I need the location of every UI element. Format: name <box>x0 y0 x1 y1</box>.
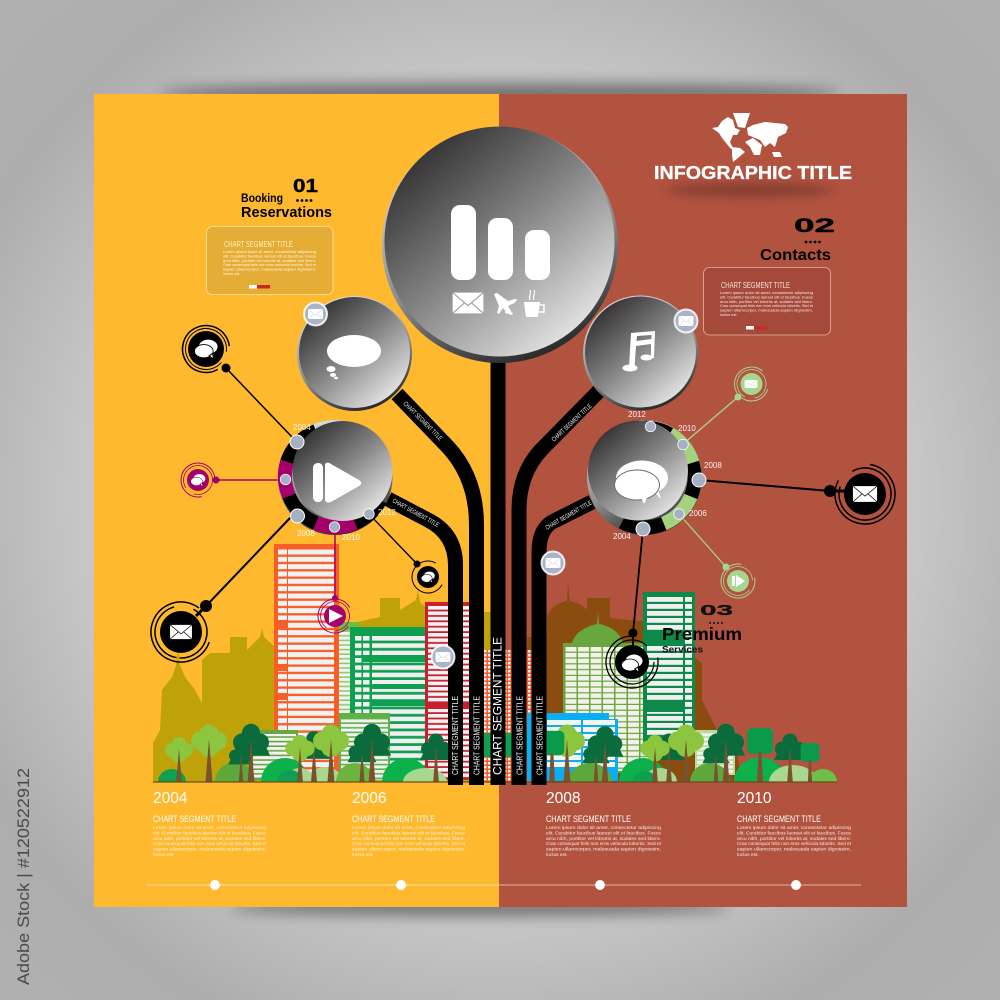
music disc <box>583 296 698 410</box>
text column 2004: elit. Curabitur faucibus laoreet elit et faucibus. Fusce <box>153 830 266 836</box>
text column 2008: Lorem ipsum dolor sit amet, consectetur adipiscing <box>546 825 661 831</box>
text column 2006 <box>352 790 466 858</box>
callout box 02 <box>704 268 830 335</box>
stock credit: Adobe Stock | #120522912 <box>14 768 33 985</box>
centre checker tower <box>484 650 532 782</box>
band labels: CHART SEGMENT TITLE <box>472 696 482 775</box>
main chart disc <box>382 126 618 363</box>
band labels: CHART SEGMENT TITLE <box>534 696 544 775</box>
text column 2006: Lorem ipsum dolor sit amet, consectetur adipiscing <box>352 825 465 831</box>
callout box 01: elit. Curabitur faucibus laoreet elit et faucibus. Fusce <box>223 253 316 258</box>
right dark green tower <box>643 592 695 742</box>
band labels <box>391 400 594 775</box>
play disc with ring <box>278 420 396 542</box>
pale green annex <box>339 622 359 720</box>
title text: INFOGRAPHIC TITLE <box>654 163 852 183</box>
icon: chat bubbles <box>614 460 668 504</box>
text column 2010: 2010 <box>737 790 772 807</box>
icon: play <box>313 463 361 503</box>
text column 2006: sapien ullamcorper, malesuada sapien dignissim, <box>352 847 465 853</box>
callout box 02: Cras consequat felis non eros vehicula lobortis. Sed et <box>720 303 814 308</box>
icon: bar chart <box>451 205 550 280</box>
text column 2008: Cras consequat felis non eros vehicula lobortis. Sed et <box>546 841 662 847</box>
text column 2008: sapien ullamcorper, malesuada sapien dignissim, <box>546 847 661 853</box>
text column 2006: Cras consequat felis non eros vehicula lobortis. Sed et <box>352 841 466 847</box>
text column 2008: CHART SEGMENT TITLE <box>546 814 631 825</box>
node: magenta chat left <box>178 460 220 500</box>
text column 2010: CHART SEGMENT TITLE <box>737 814 821 825</box>
node: black mail left <box>143 594 219 670</box>
text column 2010: sapien ullamcorper, malesuada sapien dignissim, <box>737 847 851 853</box>
text column 2004: CHART SEGMENT TITLE <box>153 814 236 825</box>
year labels: 2010 <box>678 424 696 433</box>
section 02 heading: 02 <box>794 216 835 237</box>
icon: mail <box>453 293 483 313</box>
pale mid-rise left <box>339 713 390 779</box>
section 01 heading: 01 <box>293 176 318 196</box>
red tower <box>425 602 473 780</box>
panel shadow top <box>160 83 840 105</box>
node: magenta play on tower <box>312 593 358 639</box>
text column 2006: CHART SEGMENT TITLE <box>352 814 435 825</box>
title shadow <box>666 183 834 197</box>
right pale low-rise <box>695 730 735 775</box>
section 03 heading: Premium <box>662 624 742 644</box>
world map <box>712 113 788 162</box>
orange tower <box>274 544 339 780</box>
ground line <box>153 781 837 783</box>
section 02 heading <box>760 216 835 264</box>
year labels: 2010 <box>342 533 360 542</box>
text column 2010: Cras consequat felis non eros vehicula lobortis. Sed et <box>737 841 852 847</box>
icon: mail badge <box>304 302 327 326</box>
panel: right terracotta <box>499 94 907 907</box>
text column 2006: elit. Curabitur faucibus laoreet elit et faucibus. Fusce <box>352 830 465 836</box>
icon: coffee cup <box>524 290 544 317</box>
black branch bands <box>388 355 600 785</box>
node: small black chat <box>406 555 450 599</box>
node: green play <box>718 561 758 601</box>
band labels: CHART SEGMENT TITLE <box>450 696 460 775</box>
text column 2008: elit. Curabitur faucibus laoreet elit et faucibus. Fusce <box>546 830 661 836</box>
section 01 heading: Reservations <box>241 205 332 221</box>
section 02 heading: Contacts <box>760 247 831 264</box>
text column 2010: arcu nibh, porttitor vel lobortis at, sodales sed libero. <box>737 836 851 842</box>
band badges <box>432 552 564 668</box>
ring dots <box>636 421 706 536</box>
icon: plane <box>494 293 517 315</box>
node: black chat top left <box>174 317 238 381</box>
band labels: CHART SEGMENT TITLE <box>551 403 594 443</box>
section 03 heading: 03 <box>700 602 733 619</box>
icon: mail badge <box>674 310 698 332</box>
icon: thought bubble <box>326 335 381 379</box>
text column 2004: Lorem ipsum dolor sit amet, consectetur adipiscing <box>153 825 266 831</box>
blue building <box>527 713 618 781</box>
text column 2004: Cras consequat felis non eros vehicula lobortis. Sed et <box>153 841 267 847</box>
callout box 02: luctus est. <box>720 312 738 317</box>
timeline <box>147 880 861 890</box>
band labels: CHART SEGMENT TITLE <box>391 498 440 529</box>
green tower <box>350 627 430 780</box>
section 01 heading <box>241 176 332 221</box>
callout box 02: elit. Curabitur faucibus laoreet elit et faucibus. Fusce <box>720 294 813 299</box>
trees <box>165 724 819 782</box>
callout box 01: CHART SEGMENT TITLE <box>224 239 293 249</box>
ring segments <box>285 431 380 527</box>
right pale domed building <box>563 612 655 773</box>
text column 2010 <box>737 790 852 858</box>
ring dots <box>280 435 374 532</box>
year labels: 2008 <box>297 529 315 538</box>
callout box 02: CHART SEGMENT TITLE <box>721 280 790 290</box>
section 03 heading: Services <box>662 644 703 656</box>
icon: music note <box>622 331 655 372</box>
year labels <box>613 410 722 541</box>
callout box 01: luctus est. <box>223 271 241 276</box>
year labels: 2006 <box>689 509 707 518</box>
text column 2006: arcu nibh, porttitor vel lobortis at, sodales sed libero. <box>352 836 465 842</box>
city illustration <box>153 544 837 807</box>
band labels: CHART SEGMENT TITLE <box>514 696 524 775</box>
text column 2004: 2004 <box>153 790 188 807</box>
text column 2006: 2006 <box>352 790 386 807</box>
text column 2004: luctus est. <box>153 852 175 858</box>
node: black mail right <box>824 459 900 529</box>
text column 2008: arcu nibh, porttitor vel lobortis at, sodales sed libero. <box>546 836 661 842</box>
callout box 02: Lorem ipsum dolor sit amet, consectetur adipiscing <box>720 290 813 295</box>
panel: left yellow <box>94 94 499 907</box>
chat disc with ring <box>587 410 722 541</box>
text column 2006: luctus est. <box>352 852 374 858</box>
section 03 heading <box>662 602 742 656</box>
text column 2008: luctus est. <box>546 852 568 858</box>
text column 2010: luctus est. <box>737 852 759 858</box>
ring segments <box>622 428 695 527</box>
left skyline silhouette <box>153 590 500 782</box>
connector lines <box>206 368 830 633</box>
callout box 01: Cras consequat felis non eros vehicula lobortis. Sed et <box>223 262 317 267</box>
callout box 01: arcu nibh, porttitor vel lobortis at, sodales sed libero. <box>223 258 316 263</box>
panel shadow bottom <box>230 898 730 916</box>
hills <box>158 757 837 782</box>
text column 2010: elit. Curabitur faucibus laoreet elit et faucibus. Fusce <box>737 830 851 836</box>
text column 2004: arcu nibh, porttitor vel lobortis at, sodales sed libero. <box>153 836 266 842</box>
year labels: 2004 <box>293 423 311 432</box>
text column 2004: sapien ullamcorper, malesuada sapien dignissim, <box>153 847 266 853</box>
callout box 01: Lorem ipsum dolor sit amet, consectetur adipiscing <box>223 249 316 254</box>
node: green mail <box>728 360 775 408</box>
right skyline silhouette <box>527 583 740 782</box>
callout box 02: arcu nibh, porttitor vel lobortis at, sodales sed libero. <box>720 299 813 304</box>
callout box 01 <box>206 226 333 294</box>
text column 2010: Lorem ipsum dolor sit amet, consectetur adipiscing <box>737 825 851 831</box>
section 01 heading: Booking <box>241 193 283 205</box>
callout box 01: sapien ullamcorper, malesuada sapien dignissim, <box>223 267 316 272</box>
year labels: 2012 <box>628 410 646 419</box>
text column 2004 <box>153 790 267 858</box>
callout box 02: sapien ullamcorper, malesuada sapien dignissim, <box>720 308 813 313</box>
band labels: CHART SEGMENT TITLE <box>544 499 593 532</box>
band labels: CHART SEGMENT TITLE <box>490 637 504 775</box>
speech disc <box>297 296 412 411</box>
year labels <box>293 423 396 542</box>
year labels: 2004 <box>613 532 631 541</box>
text column 2008 <box>546 790 662 858</box>
small low-rise left <box>251 730 298 780</box>
text column 2008: 2008 <box>546 790 580 807</box>
title block <box>654 113 852 197</box>
year labels: 2012 <box>378 508 396 517</box>
node: black chat on building <box>601 628 663 693</box>
band labels: CHART SEGMENT TITLE <box>402 400 444 443</box>
year labels: 2008 <box>704 461 722 470</box>
